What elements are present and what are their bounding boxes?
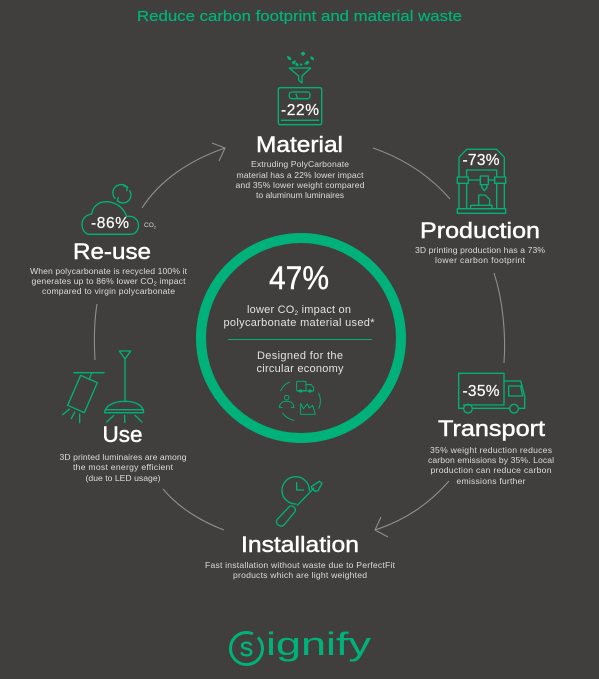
icon: funnel and scale xyxy=(278,52,322,125)
heading: material: Material xyxy=(256,132,343,157)
transport description xyxy=(428,445,554,486)
green ring xyxy=(201,238,401,438)
heading: installation: Installation xyxy=(241,532,359,557)
panel: centre circle xyxy=(201,238,401,438)
label CO2: 2 xyxy=(154,224,157,230)
arrow: re-use to use xyxy=(94,304,97,360)
icon: circular economy xyxy=(279,381,320,420)
panel: transport xyxy=(428,373,554,486)
logo: signify: ignify xyxy=(266,626,371,662)
logo: signify xyxy=(224,626,371,671)
heading: re-use: Re-use xyxy=(73,239,151,264)
arrow: transport to installation xyxy=(375,481,449,537)
material description: to aluminum luminaires xyxy=(256,190,344,200)
use description: 3D printed luminaires are among xyxy=(60,452,187,462)
material description: material has a 22% lower impact xyxy=(236,170,364,180)
title: Reduce carbon footprint and material waste xyxy=(137,9,462,25)
panel: material xyxy=(236,52,365,200)
logo: signify: s xyxy=(240,632,253,662)
value -22%: -22% xyxy=(281,102,319,119)
icon: clock and screwdriver xyxy=(276,477,322,526)
material description xyxy=(236,159,365,200)
material description: Extruding PolyCarbonate xyxy=(251,159,349,169)
production description: 3D printing production has a 73% xyxy=(415,245,545,255)
icon: truck xyxy=(459,373,525,413)
centre description: lower CO xyxy=(247,304,294,316)
panel: re-use xyxy=(30,185,188,296)
circular economy text: Designed for the xyxy=(257,350,343,362)
re-use description: When polycarbonate is recycled 100% it xyxy=(30,266,188,276)
panel: installation xyxy=(205,477,396,580)
transport description: 35% weight reduction reduces xyxy=(430,445,552,455)
centre description: 2 xyxy=(295,310,299,317)
centre description xyxy=(224,304,375,329)
icon: cloud with recycling xyxy=(82,185,139,234)
panel: use xyxy=(60,351,187,483)
centre description: impact on xyxy=(298,304,351,316)
arrow: production to transport xyxy=(494,273,505,363)
re-use description: 2 xyxy=(154,282,157,288)
heading: transport: Transport xyxy=(438,416,545,441)
arrow: re-use to material xyxy=(142,143,225,208)
transport description: production can reduce carbon xyxy=(430,465,552,475)
use description xyxy=(60,452,187,483)
re-use description: compared to virgin polycarbonate xyxy=(42,286,175,296)
icon: luminaires xyxy=(63,351,144,423)
value -35%: -35% xyxy=(462,383,500,400)
panel: production xyxy=(415,149,545,265)
heading: use: Use xyxy=(102,422,142,447)
use description: the most energy efficient xyxy=(73,462,174,472)
centre description: polycarbonate material used* xyxy=(224,317,375,329)
arrow: use to installation xyxy=(163,489,224,530)
re-use description xyxy=(30,266,188,296)
material description: and 35% lower weight compared xyxy=(236,180,365,190)
use description: (due to LED usage) xyxy=(86,473,161,483)
value -73%: -73% xyxy=(462,152,500,169)
big number 47%: 47% xyxy=(269,260,329,296)
installation description xyxy=(205,560,396,580)
heading: production: Production xyxy=(420,218,540,243)
production description xyxy=(415,245,545,265)
re-use description: generates up to 86% lower CO xyxy=(32,276,153,286)
production description: lower carbon footprint xyxy=(435,255,526,265)
transport description: carbon emissions by 35%. Local xyxy=(428,455,554,465)
circular economy text: circular economy xyxy=(256,363,344,375)
circular economy text xyxy=(256,350,344,375)
value -86%: -86% xyxy=(91,215,129,232)
label CO2: CO xyxy=(144,222,154,229)
installation description: Fast installation without waste due to PerfectFit xyxy=(205,560,396,570)
re-use description: impact xyxy=(157,276,186,286)
transport description: emissions further xyxy=(456,476,526,486)
installation description: products which are light weighted xyxy=(233,570,367,580)
icon: 3D printer xyxy=(457,149,506,213)
arrow: material to production xyxy=(373,148,450,199)
